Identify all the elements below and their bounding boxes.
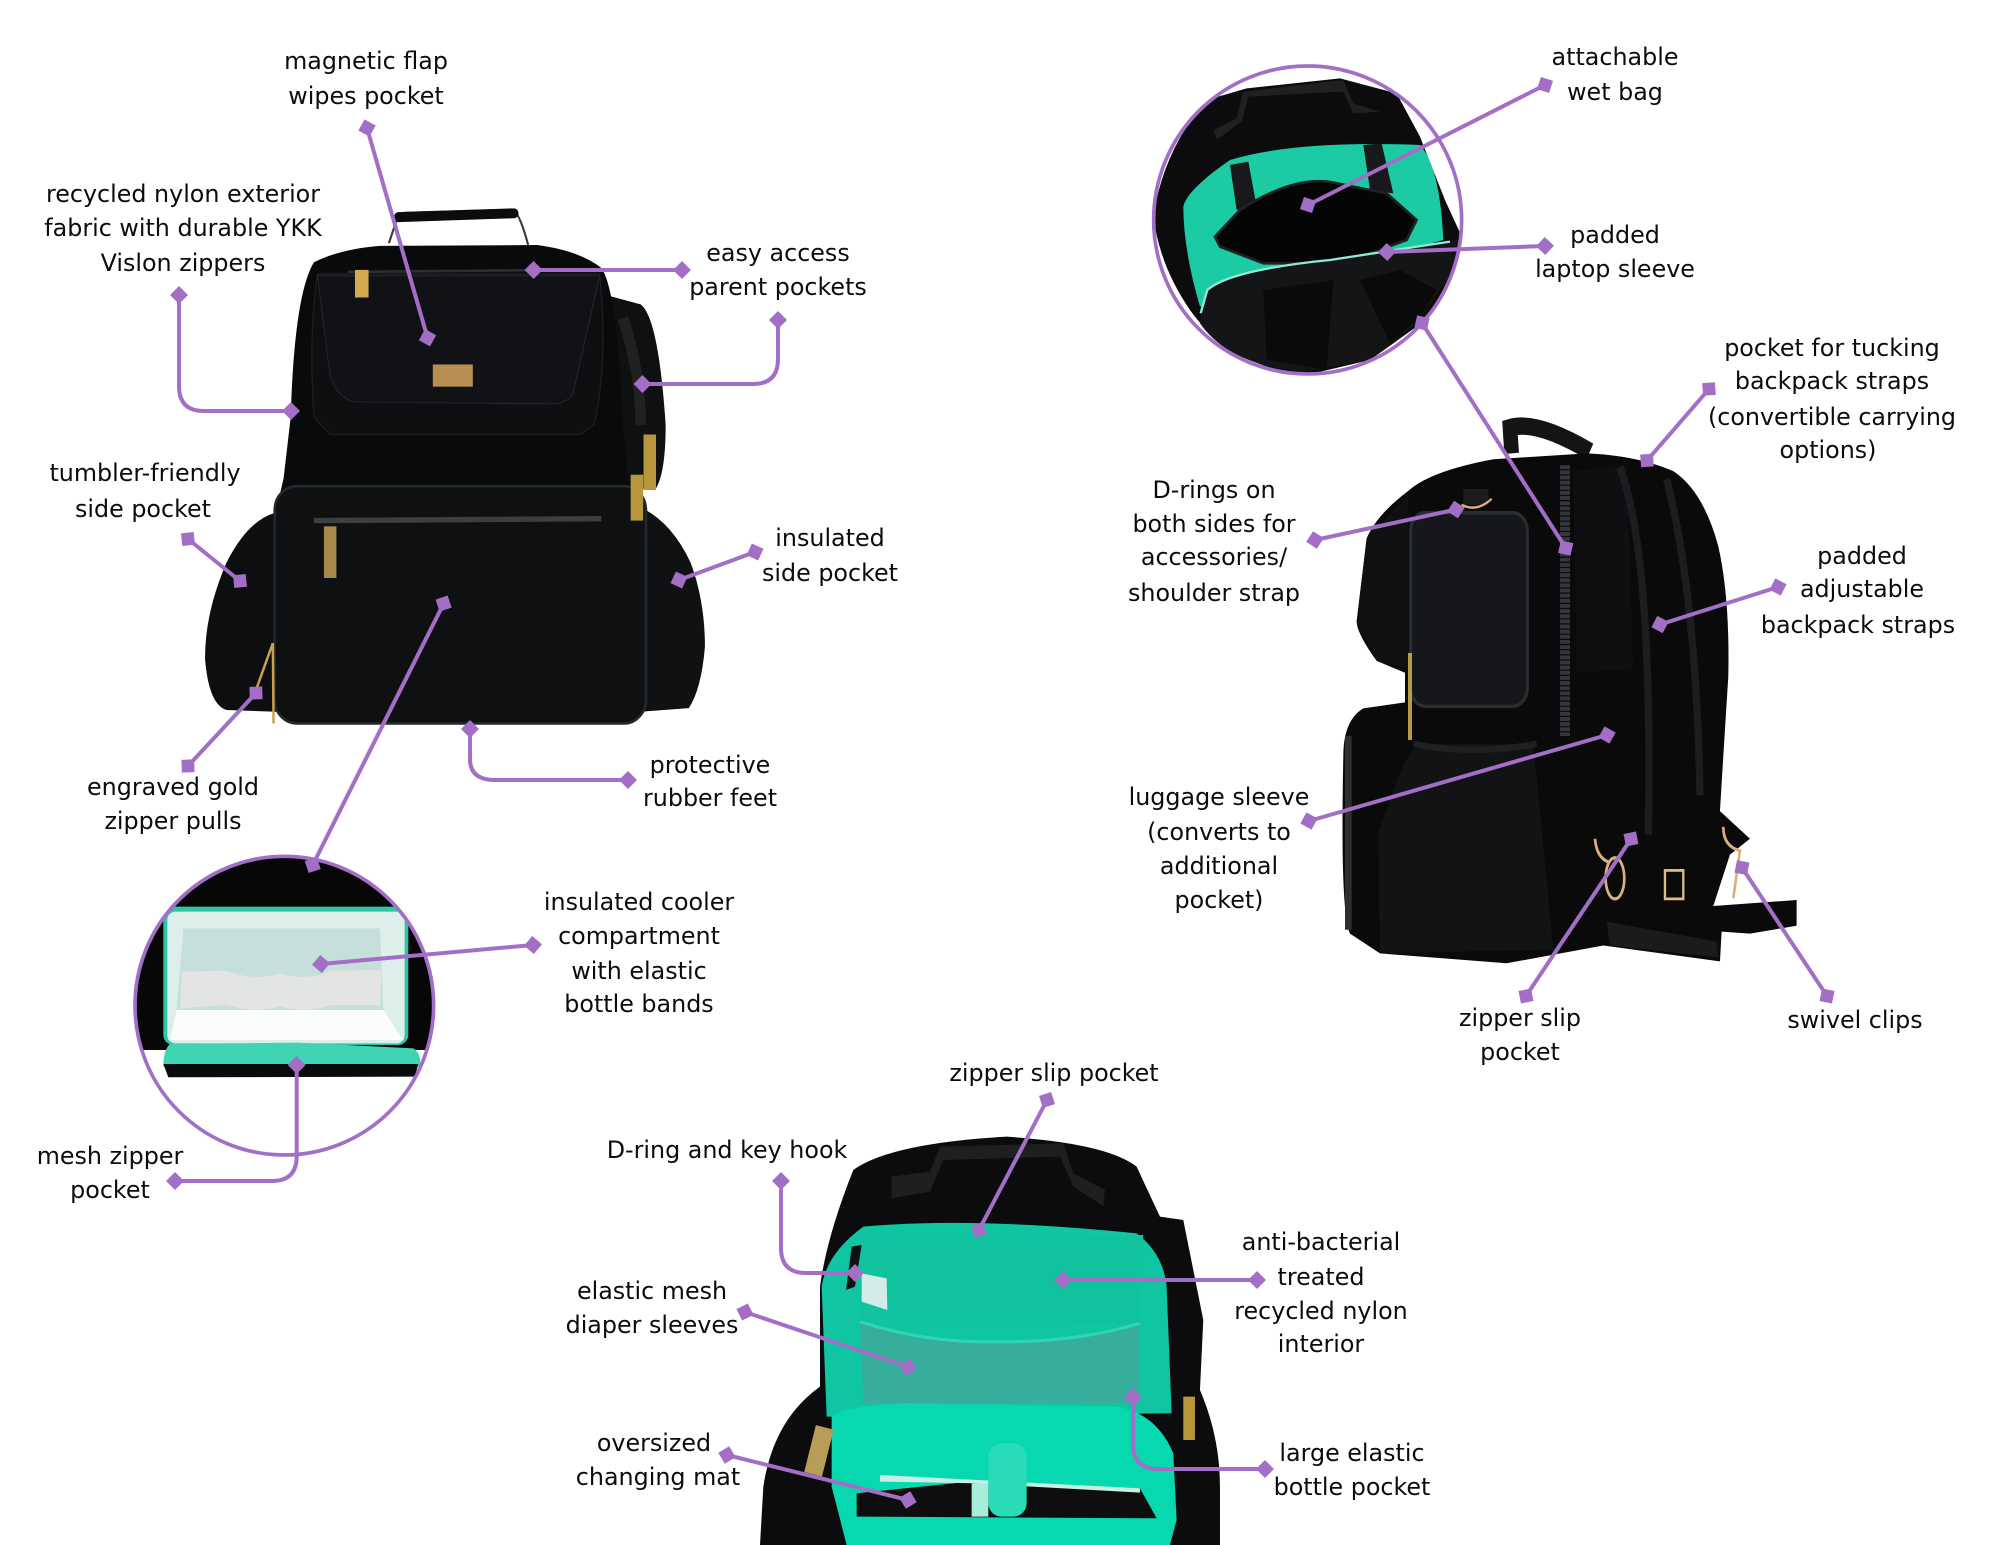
circle outline: laptop inset [1154,66,1462,374]
connector: protective rubber feet [470,729,628,780]
label: D-ring and key hook: D-ring and key hook [607,1136,848,1164]
label: insulated side pocket: side pocket [762,559,898,587]
label: recycled nylon exterior: recycled nylon exterior [46,180,320,208]
connector: swivel clips [1742,868,1827,996]
label: padded adjustable backpack straps: adjustable [1800,575,1924,603]
connector: padded laptop sleeve [1387,246,1545,252]
label: luggage sleeve: additional [1160,852,1278,880]
label: pocket for tucking backpack straps: (convertible carrying [1708,403,1956,431]
label: magnetic flap wipes pocket: magnetic flap [284,47,448,75]
label: oversized changing mat: oversized [597,1429,711,1457]
label: anti-bacterial treated recycled nylon interior: recycled nylon [1234,1297,1408,1325]
side view backpack [1342,426,1797,963]
label: padded adjustable backpack straps: padded [1817,542,1907,570]
connector: anti-bacterial interior [1063,1278,1257,1282]
label: insulated side pocket: insulated [775,524,885,552]
label: anti-bacterial treated recycled nylon interior: interior [1278,1330,1364,1358]
label: easy access parent pockets: parent pockets [689,273,867,301]
label: elastic mesh diaper sleeves: elastic mesh [577,1277,727,1305]
connector: recycled nylon exterior [179,295,291,411]
label: recycled nylon exterior: Vislon zippers [101,249,265,277]
label: pocket for tucking backpack straps: pocket for tucking [1724,334,1940,362]
label: insulated cooler compartment: compartment [558,922,720,950]
connector: oversized changing mat [727,1455,908,1500]
label: zipper slip pocket side: pocket [1480,1038,1560,1066]
label: D-rings: accessories/ [1141,543,1288,571]
connector: easy access parent pockets side [642,320,778,384]
connector: D-ring and key hook [781,1181,855,1273]
label: luggage sleeve: pocket) [1175,886,1263,914]
connector: insulated cooler compartment [321,945,533,964]
label: protective rubber feet: protective [650,751,770,779]
label: D-rings: both sides for [1132,510,1296,538]
inset circle: insulated cooler compartment [133,856,437,1155]
label: D-rings: shoulder strap [1128,579,1300,607]
connector: insulated side pocket [679,552,755,580]
label: large elastic bottle pocket: large elastic [1279,1439,1425,1467]
label: oversized changing mat: changing mat [576,1463,740,1491]
connector: engraved gold zipper pulls [188,693,256,766]
connector: D-rings [1315,510,1456,540]
connector: zipper slip pocket side [1526,839,1631,996]
connector: luggage sleeve [1309,735,1607,821]
label: padded adjustable backpack straps: backpack straps [1761,611,1955,639]
label: zipper slip pocket interior: zipper slip pocket [949,1059,1159,1087]
label: magnetic flap wipes pocket: wipes pocket [288,82,444,110]
circle outline: cooler inset [135,856,434,1155]
connector: back zipper to laptop inset [1422,323,1566,548]
label: anti-bacterial treated recycled nylon interior: anti-bacterial [1242,1228,1400,1256]
label: elastic mesh diaper sleeves: diaper sleeves [566,1311,738,1339]
label: mesh zipper pocket: pocket [70,1176,150,1204]
front view backpack [205,210,705,723]
connector: attachable wet bag [1308,85,1545,205]
connector: elastic mesh diaper sleeves [745,1312,908,1367]
connector: tumbler-friendly side pocket [188,539,240,581]
label: luggage sleeve: (converts to [1147,818,1291,846]
label: engraved gold zipper pulls: zipper pulls [104,807,242,835]
connector: front pocket to cooler inset [313,604,444,865]
label: tumbler-friendly side pocket: tumbler-friendly [49,459,241,487]
label: swivel clips: swivel clips [1787,1006,1923,1034]
label: mesh zipper pocket: mesh zipper [37,1142,184,1170]
connector: mesh zipper pocket [175,1065,297,1181]
label: tumbler-friendly side pocket: side pocket [75,495,211,523]
label: D-rings: D-rings on [1152,476,1276,504]
label: zipper slip pocket side: zipper slip [1459,1004,1581,1032]
label: padded laptop sleeve: laptop sleeve [1535,255,1695,283]
connector: padded adjustable backpack straps [1660,587,1778,624]
label: insulated cooler compartment: with elastic [571,957,707,985]
label: easy access parent pockets: easy access [706,239,850,267]
label: anti-bacterial treated recycled nylon interior: treated [1278,1263,1364,1291]
label: protective rubber feet: rubber feet [643,784,777,812]
inset circle: opened laptop and wet bag compartment [1153,66,1463,375]
connector: zipper slip pocket interior [979,1100,1047,1230]
label: pocket for tucking backpack straps: options) [1780,436,1876,464]
connector: pocket for tucking backpack straps [1647,389,1709,460]
connector: easy access parent pockets top [534,268,682,272]
label: insulated cooler compartment: bottle bands [564,990,714,1018]
connector: large elastic bottle pocket [1133,1397,1265,1469]
label: large elastic bottle pocket: bottle pocket [1274,1473,1430,1501]
label: attachable wet bag: attachable [1552,43,1678,71]
label: insulated cooler compartment: insulated cooler [544,888,734,916]
bottom view: open main compartment backpack [760,1137,1220,1545]
label: engraved gold zipper pulls: engraved gold [87,773,259,801]
label: pocket for tucking backpack straps: backpack straps [1735,367,1929,395]
label: luggage sleeve: luggage sleeve [1129,783,1309,811]
label: attachable wet bag: wet bag [1567,78,1663,106]
label: padded laptop sleeve: padded [1570,221,1660,249]
label: recycled nylon exterior: fabric with durable YKK [44,214,323,242]
connector: magnetic flap wipes pocket [367,128,428,338]
